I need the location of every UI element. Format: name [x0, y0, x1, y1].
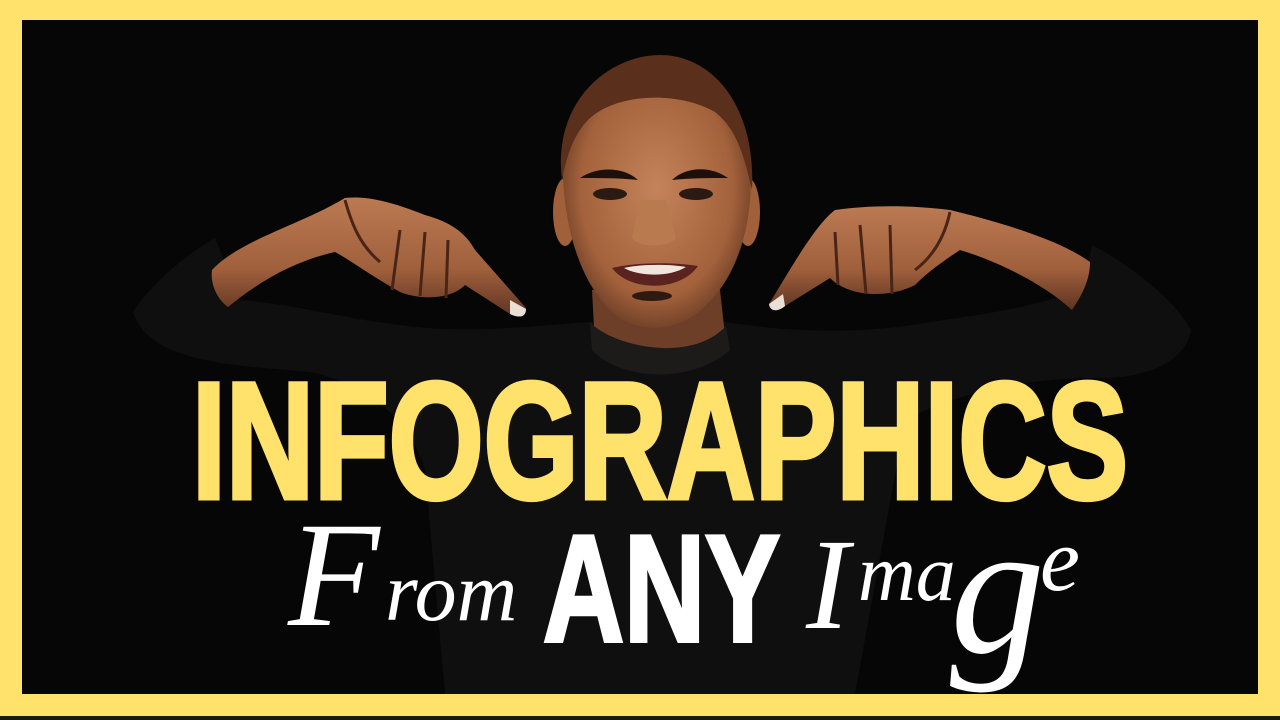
eyes — [593, 188, 627, 200]
subtitle word: Image: g — [950, 484, 1045, 694]
subtitle word: Image: I — [805, 513, 855, 657]
person pointing down — [133, 55, 1191, 694]
subtitle word: From: rom — [385, 546, 517, 639]
left hand finger creases — [345, 200, 448, 298]
right fingernail — [769, 294, 785, 310]
subtitle word: From: F — [287, 492, 381, 658]
left forearm and hand — [212, 197, 526, 316]
sweater — [133, 238, 1191, 694]
mouth — [612, 263, 698, 286]
face — [563, 60, 751, 328]
ears — [553, 178, 577, 246]
goatee — [632, 291, 672, 301]
nose — [632, 200, 676, 246]
neck and collar — [592, 290, 725, 365]
eyebrows — [580, 169, 728, 180]
left fingernail — [510, 300, 526, 317]
subtitle word: ANY: ANY — [543, 504, 780, 674]
subtitle word: Image: e — [1040, 511, 1080, 610]
subtitle word: Image: ma — [858, 530, 956, 618]
right hand finger creases — [835, 212, 950, 294]
right forearm and hand — [769, 206, 1090, 310]
hair — [561, 55, 752, 190]
